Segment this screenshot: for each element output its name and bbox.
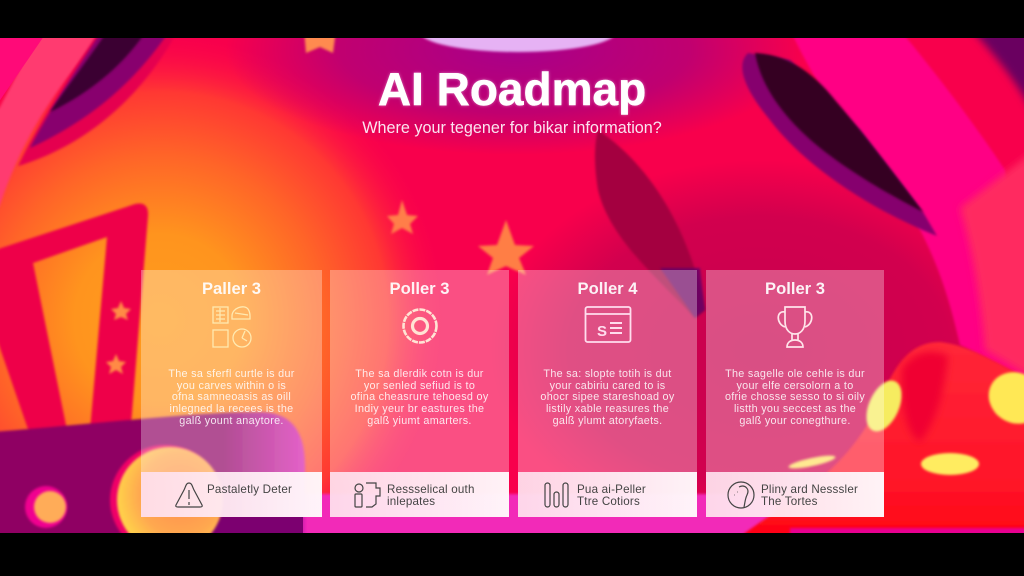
bottom pink strip	[303, 492, 770, 533]
text block: pillar 4: ofrie chosse sesso to si oily	[725, 391, 865, 403]
stars	[303, 38, 337, 54]
heading: pillar 3: Poller 4	[578, 279, 637, 298]
right magenta band	[790, 30, 1024, 380]
text block: pillar 2: Indiy yeur br eastures the	[355, 403, 484, 415]
centre dark lens	[595, 130, 705, 318]
text block: pillar 1: you carves within o is	[177, 380, 286, 392]
text block: pillar 1: ofna samneoasis as oill	[172, 391, 291, 403]
footer label: Pliny ard Nesssler	[761, 483, 858, 496]
text block: pillar 1	[168, 368, 295, 427]
panel: pillar 4	[706, 270, 884, 517]
subtitle: Where your tegener for bikar information?	[362, 119, 662, 137]
title: AI Roadmap	[378, 63, 646, 115]
dark left lens	[18, 30, 178, 166]
text block: pillar 4: galß your conegthure.	[739, 415, 851, 427]
text block: pillar 4: The sagelle ole cehle is dur	[725, 368, 865, 380]
text block: pillar 3: The sa: slopte totih is dut	[543, 368, 672, 380]
text block: pillar 2: The sa dlerdik cotn is dur	[355, 368, 484, 380]
footer label: Pastaletly Deter	[207, 483, 292, 496]
left triangle frame	[0, 204, 148, 435]
heading: pillar 4: Poller 3	[765, 279, 825, 298]
dark right lens	[742, 53, 937, 236]
text block: pillar 3: ohocr sipee stareshoad oy	[540, 391, 675, 403]
left pink band	[0, 38, 96, 208]
footer label: Pua ai-Peller	[577, 483, 646, 496]
text block: pillar 3: galß ylumt atoryfaets.	[553, 415, 662, 427]
footer label: The Tortes	[761, 495, 818, 508]
text block: pillar 2: ofina cheasrure tehoesd oy	[350, 391, 489, 403]
callout: pillar 3 footer	[518, 472, 697, 517]
text block: pillar 2	[350, 368, 489, 427]
icon: bar chart	[544, 482, 569, 508]
footer label	[387, 483, 475, 508]
heading: pillar 2: Poller 3	[390, 279, 449, 298]
text block: pillar 2: yor senled sefiud is to	[364, 380, 475, 392]
text block: pillar 4: your elfe cersolorn a to	[736, 380, 854, 392]
text block: pillar 3: your cabiriu cared to is	[550, 380, 665, 392]
left purple device	[0, 412, 305, 545]
text block: pillar 4	[725, 368, 865, 427]
text block: pillar 1: inlegned la recees is the	[170, 403, 293, 415]
footer label: inlepates	[387, 495, 435, 508]
icon: browser window	[584, 306, 632, 343]
footer label	[761, 483, 858, 508]
icon: puzzle	[354, 482, 381, 508]
icon: warning triangle	[175, 482, 203, 508]
text block: pillar 1: galß yount anaytore.	[179, 415, 284, 427]
panel: pillar 2	[330, 270, 509, 517]
right red mound	[735, 342, 1024, 545]
text block: pillar 4: listth you seccest as the	[734, 403, 856, 415]
text block: pillar 1: The sa sferfl curtle is dur	[168, 368, 295, 380]
footer label: Ressselical outh	[387, 483, 475, 496]
text block: pillar 3: listily xable reasures the	[546, 403, 669, 415]
callout: pillar 2 footer	[330, 472, 509, 517]
text block: pillar 3	[540, 368, 675, 427]
text block: pillar 2: galß yiumt amarters.	[367, 415, 472, 427]
footer label	[577, 483, 646, 508]
footer label: Ttre Cotiors	[577, 495, 640, 508]
heading: pillar 1: Paller 3	[202, 279, 261, 298]
icon: circle swirl	[727, 481, 755, 509]
callout: pillar 4 footer	[706, 472, 884, 517]
callout: pillar 1 footer	[141, 472, 322, 517]
icon: browser window: S	[596, 323, 607, 340]
icon: gear ring	[402, 308, 438, 344]
panel: pillar 3	[518, 270, 697, 517]
icon: trophy	[777, 306, 813, 348]
panel: pillar 1	[141, 270, 322, 517]
icon: dashboard tiles	[212, 306, 252, 348]
